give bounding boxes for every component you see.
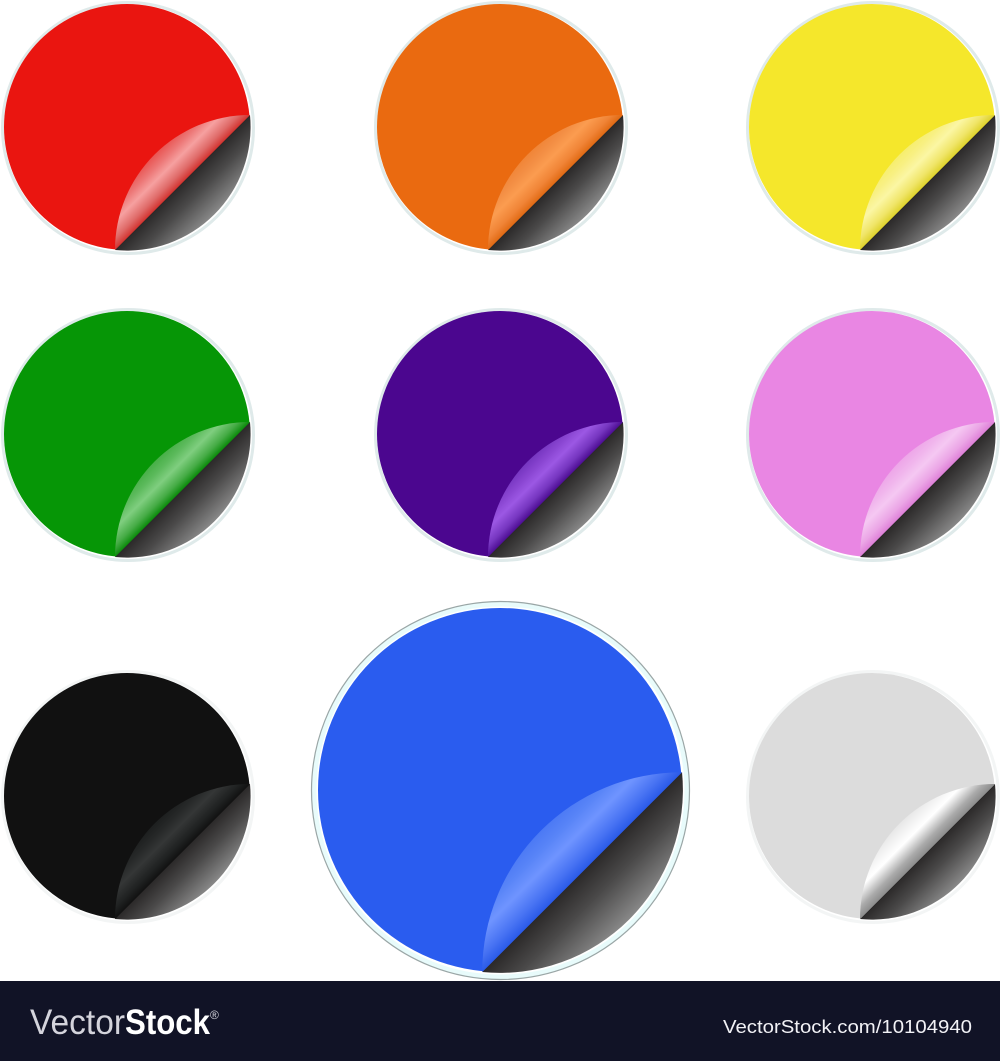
footer logo: VectorStock: VectorStock (30, 1003, 210, 1042)
sticker: green (2, 310, 254, 560)
sticker: red (2, 2, 254, 254)
footer logo: registered mark: ® (210, 1008, 219, 1022)
sticker: light grey (748, 672, 998, 922)
sticker: purple (376, 310, 626, 560)
footer image id: VectorStock.com/10104940 (723, 1016, 972, 1037)
sticker: pink (748, 310, 998, 560)
sticker: black (2, 672, 254, 922)
footer bar (0, 981, 1000, 1061)
sticker: yellow (748, 2, 998, 254)
sticker: orange (376, 2, 626, 254)
sticker: large blue (312, 602, 690, 980)
